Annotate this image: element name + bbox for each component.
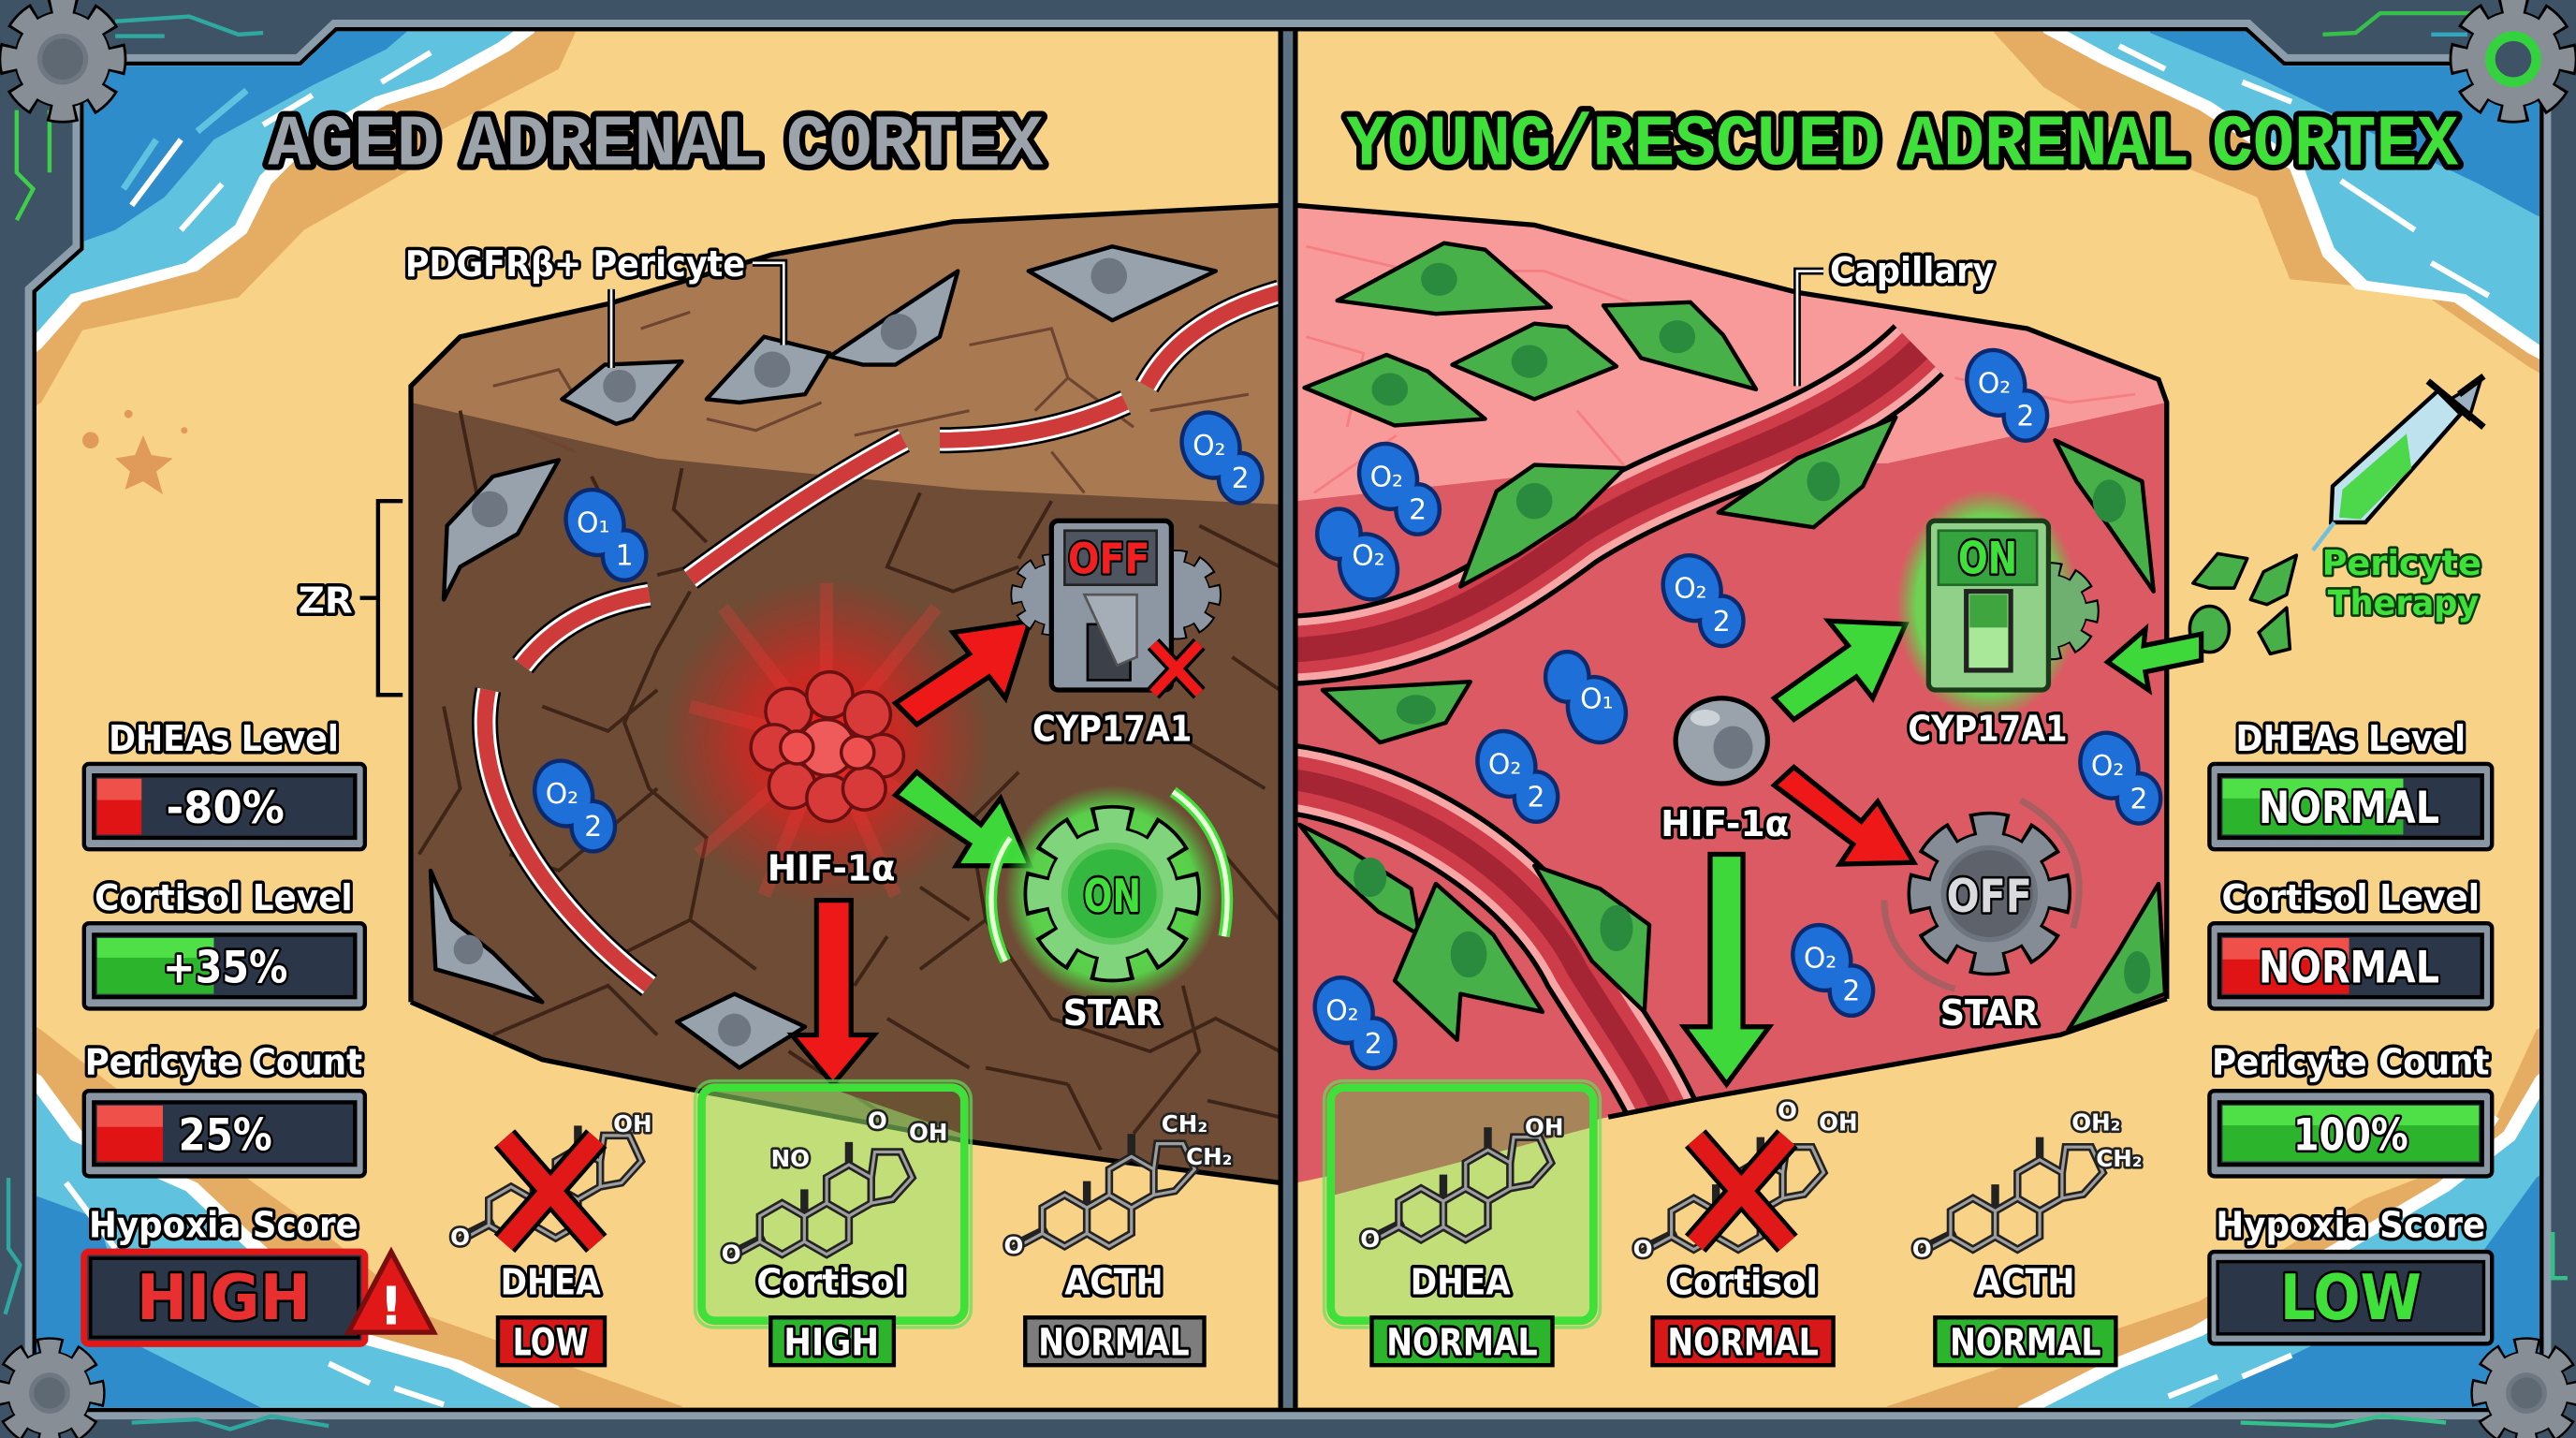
switch: CYP17A1 off: OFF xyxy=(1068,534,1150,583)
molecule: ACTH aged: O xyxy=(1004,1232,1023,1259)
molecule: cortisol aged xyxy=(722,1107,947,1268)
sidebar right: cortisol level: Cortisol Level xyxy=(2222,877,2480,919)
label: pericyte therapy: Pericyte xyxy=(2322,543,2481,583)
HIF-1a inactive grey xyxy=(1676,698,1767,784)
HIF-1a hot cluster xyxy=(662,579,990,907)
molecule: ACTH aged: CH₂ xyxy=(1162,1110,1208,1137)
sidebar left: pericyte count: 25% xyxy=(179,1109,272,1161)
arrow: HIF to STAR red xyxy=(1774,767,1914,864)
panel: young tissue xyxy=(1273,205,2167,1182)
label: CYP17A1 young: CYP17A1 xyxy=(1908,708,2068,750)
labels and badges: left hormones: ACTH xyxy=(1064,1262,1164,1304)
molecule: DHEA young xyxy=(1360,1114,1563,1253)
callout: PDGFRb+ pericyte: PDGFRβ+ Pericyte xyxy=(405,243,745,286)
molecule: cortisol young with X xyxy=(1633,1097,1858,1262)
ocean: bottom right xyxy=(1885,1028,2540,1408)
icon: corner gear top-right xyxy=(2461,7,2566,111)
molecule: ACTH young: O xyxy=(1912,1235,1932,1262)
labels and badges: right hormones: ACTH xyxy=(1976,1262,2075,1304)
molecule: DHEA young: OH xyxy=(1525,1114,1563,1141)
O2 molecules: young: O₂ xyxy=(1978,367,2011,400)
sidebar right: hypoxia score xyxy=(2209,1204,2492,1343)
arrow: HIF to CYP17A1 red xyxy=(896,621,1031,725)
O2 molecules: young: O₂ xyxy=(1325,995,1359,1028)
O2 molecules: young: O₁ xyxy=(1580,682,1614,715)
title: aged: AGED ADRENAL CORTEX xyxy=(268,105,1044,186)
sidebar left: hypoxia score: Hypoxia Score xyxy=(89,1204,359,1246)
gear: STAR on xyxy=(991,785,1227,1002)
capillaries, broken xyxy=(485,292,1280,986)
callout: ZR bracket xyxy=(299,501,402,695)
sidebar left: cortisol level: +35% xyxy=(163,942,287,993)
labels and badges: right hormones: NORMAL xyxy=(1386,1321,1538,1365)
panel: aged adrenal cortex tissue xyxy=(411,205,1280,1182)
molecule: DHEA aged with X: OH xyxy=(613,1110,652,1137)
O2 molecules: aged: 1 xyxy=(616,540,634,573)
O2 molecules: young: O₂ xyxy=(1804,943,1837,976)
labels and badges: right hormones xyxy=(1371,1262,2115,1365)
sidebar right: DHEAs level xyxy=(2209,718,2492,849)
sidebar left: DHEAs level: -80% xyxy=(167,783,285,834)
callout: capillary: Capillary xyxy=(1830,250,1995,292)
sidebar left: pericyte count xyxy=(84,1042,365,1176)
molecule: cortisol young with X: OH xyxy=(1819,1108,1858,1136)
molecule: DHEA young: O xyxy=(1360,1225,1380,1253)
sidebar right: DHEAs level: NORMAL xyxy=(2259,783,2439,834)
labels and badges: left hormones: DHEA xyxy=(501,1262,601,1304)
label: STAR aged: STAR xyxy=(1063,992,1162,1034)
labels and badges: left hormones: NORMAL xyxy=(1038,1321,1190,1365)
icon: corner gear bottom-right xyxy=(2481,1347,2572,1438)
O2 molecules: young: 2 xyxy=(1713,606,1731,638)
icon: corner gear bottom-left xyxy=(4,1347,95,1438)
labels and badges: left hormones xyxy=(498,1262,1205,1365)
label: pericyte therapy: Therapy xyxy=(2328,582,2479,623)
O2 molecules: young: 2 xyxy=(2130,783,2147,815)
sidebar right: cortisol level xyxy=(2209,877,2492,1008)
icon: warning triangle xyxy=(348,1252,434,1337)
molecule: cortisol aged: O xyxy=(868,1107,887,1134)
molecule: cortisol aged: OH xyxy=(909,1119,947,1146)
label: pericyte therapy xyxy=(2322,543,2481,623)
label: STAR young: STAR xyxy=(1940,992,2039,1034)
arrow: HIF to DHEA green down xyxy=(1684,854,1769,1084)
sidebar left: hypoxia score xyxy=(84,1204,365,1343)
sidebar left: cortisol level xyxy=(84,877,365,1008)
molecule: ACTH young xyxy=(1912,1108,2143,1262)
labels and badges: right hormones: Cortisol xyxy=(1668,1262,1818,1304)
icon: warning triangle: ! xyxy=(379,1276,403,1337)
switch: CYP17A1 off xyxy=(1017,521,1213,693)
pericytes: healthy green cells xyxy=(1299,243,2165,1040)
sidebar right: pericyte count xyxy=(2209,1042,2492,1176)
gear: STAR off xyxy=(1884,800,2079,989)
O2 molecules: aged: 2 xyxy=(1232,462,1250,495)
O2 molecules: young: 2 xyxy=(1409,493,1427,526)
molecule: ACTH aged: CH₂ xyxy=(1186,1143,1232,1170)
molecule: cortisol young with X: O xyxy=(1778,1097,1797,1124)
switch: CYP17A1 on xyxy=(1895,490,2090,720)
icon: starfish xyxy=(82,410,187,494)
label: HIF-1a young: HIF-1α xyxy=(1661,803,1789,845)
O2 molecules: aged: O₁ xyxy=(577,507,609,540)
O2 molecules: aged: 2 xyxy=(584,811,602,844)
capillary: main xyxy=(1273,350,1919,651)
sidebar left: pericyte count: Pericyte Count xyxy=(85,1042,362,1084)
O2 molecules: young: O₂ xyxy=(1488,748,1521,781)
molecule: cortisol aged: O xyxy=(722,1240,741,1268)
icon: syringe xyxy=(2313,376,2483,550)
icon: corner gear top-left xyxy=(10,7,115,111)
O2 molecules: aged: O₂ xyxy=(546,778,578,811)
molecule: DHEA aged with X xyxy=(450,1110,652,1251)
O2 molecules: young: O₂ xyxy=(1352,540,1385,573)
sidebar left: hypoxia score: HIGH xyxy=(137,1261,311,1334)
sidebar left: DHEAs level xyxy=(84,718,365,849)
tissue cracks xyxy=(419,312,1280,1150)
molecule: cortisol young with X: O xyxy=(1633,1235,1652,1262)
therapy cells xyxy=(2189,553,2296,653)
molecule: DHEA aged with X: O xyxy=(450,1224,470,1251)
molecule: ACTH young: OH₂ xyxy=(2071,1108,2120,1136)
pericytes: aged grey cells xyxy=(431,246,1216,1068)
hormone: cortisol highlight box left xyxy=(695,1081,971,1328)
labels and badges: right hormones: NORMAL xyxy=(1950,1321,2101,1365)
O2 molecules: aged: O₂ xyxy=(1193,430,1225,462)
gear: STAR on: ON xyxy=(1084,869,1141,923)
callout: PDGFRb+ pericyte xyxy=(405,243,783,368)
molecule: ACTH young: CH₂ xyxy=(2096,1145,2143,1172)
title: young: YOUNG/RESCUED ADRENAL CORTEX xyxy=(1346,105,2459,186)
ocean: bottom left xyxy=(36,1026,681,1408)
O2 molecules: aged xyxy=(528,407,1260,849)
sidebar right: pericyte count: 100% xyxy=(2293,1109,2408,1161)
capillary: lower xyxy=(1273,777,1666,1117)
labels and badges: left hormones: Cortisol xyxy=(756,1262,906,1304)
switch: CYP17A1 on: ON xyxy=(1958,533,2017,584)
O2 molecules: young: 2 xyxy=(1365,1028,1383,1061)
faint cracks xyxy=(1306,246,2135,492)
O2 molecules: young: O₂ xyxy=(1370,461,1403,493)
sidebar right: pericyte count: Pericyte Count xyxy=(2212,1042,2490,1084)
molecule: cortisol aged: NO xyxy=(771,1145,810,1172)
O2 molecules: young: 2 xyxy=(1527,782,1544,814)
labels and badges: right hormones: DHEA xyxy=(1411,1262,1511,1304)
sidebar left: DHEAs level: DHEAs Level xyxy=(109,718,339,760)
labels and badges: left hormones: HIGH xyxy=(783,1321,879,1365)
labels and badges: left hormones: LOW xyxy=(513,1321,588,1365)
O2 molecules: young: 2 xyxy=(2016,400,2034,433)
O2 molecules: young: 2 xyxy=(1842,976,1860,1008)
labels and badges: right hormones: NORMAL xyxy=(1667,1321,1819,1365)
arrow: HIF to STAR green xyxy=(896,772,1031,866)
label: HIF-1a aged: HIF-1α xyxy=(768,848,896,890)
sidebar right: hypoxia score: Hypoxia Score xyxy=(2216,1204,2485,1246)
arrow: therapy to CYP17A1 xyxy=(2108,629,2202,690)
sidebar right: hypoxia score: LOW xyxy=(2280,1261,2422,1334)
ocean: top right xyxy=(1994,31,2540,373)
sidebar left: cortisol level: Cortisol Level xyxy=(95,877,353,919)
ocean: top left xyxy=(36,31,575,405)
sidebar right: DHEAs level: DHEAs Level xyxy=(2235,718,2466,760)
sidebar right: cortisol level: NORMAL xyxy=(2259,942,2439,993)
center divider xyxy=(1278,31,1298,1408)
arrow: HIF to cortisol red down xyxy=(792,901,874,1084)
molecule: ACTH aged xyxy=(1004,1110,1232,1259)
label: CYP17A1 aged: CYP17A1 xyxy=(1032,708,1192,750)
arrow: HIF to CYP17A1 green xyxy=(1774,621,1906,720)
O2 molecules: young xyxy=(1309,345,2159,1066)
callout: ZR bracket: ZR xyxy=(299,580,353,623)
callout: capillary xyxy=(1797,250,1995,386)
hormone: DHEA highlight box right xyxy=(1325,1081,1600,1328)
O2 molecules: young: O₂ xyxy=(1674,573,1707,606)
O2 molecules: young: O₂ xyxy=(2091,750,2124,783)
gear: STAR off: OFF xyxy=(1947,869,2032,923)
